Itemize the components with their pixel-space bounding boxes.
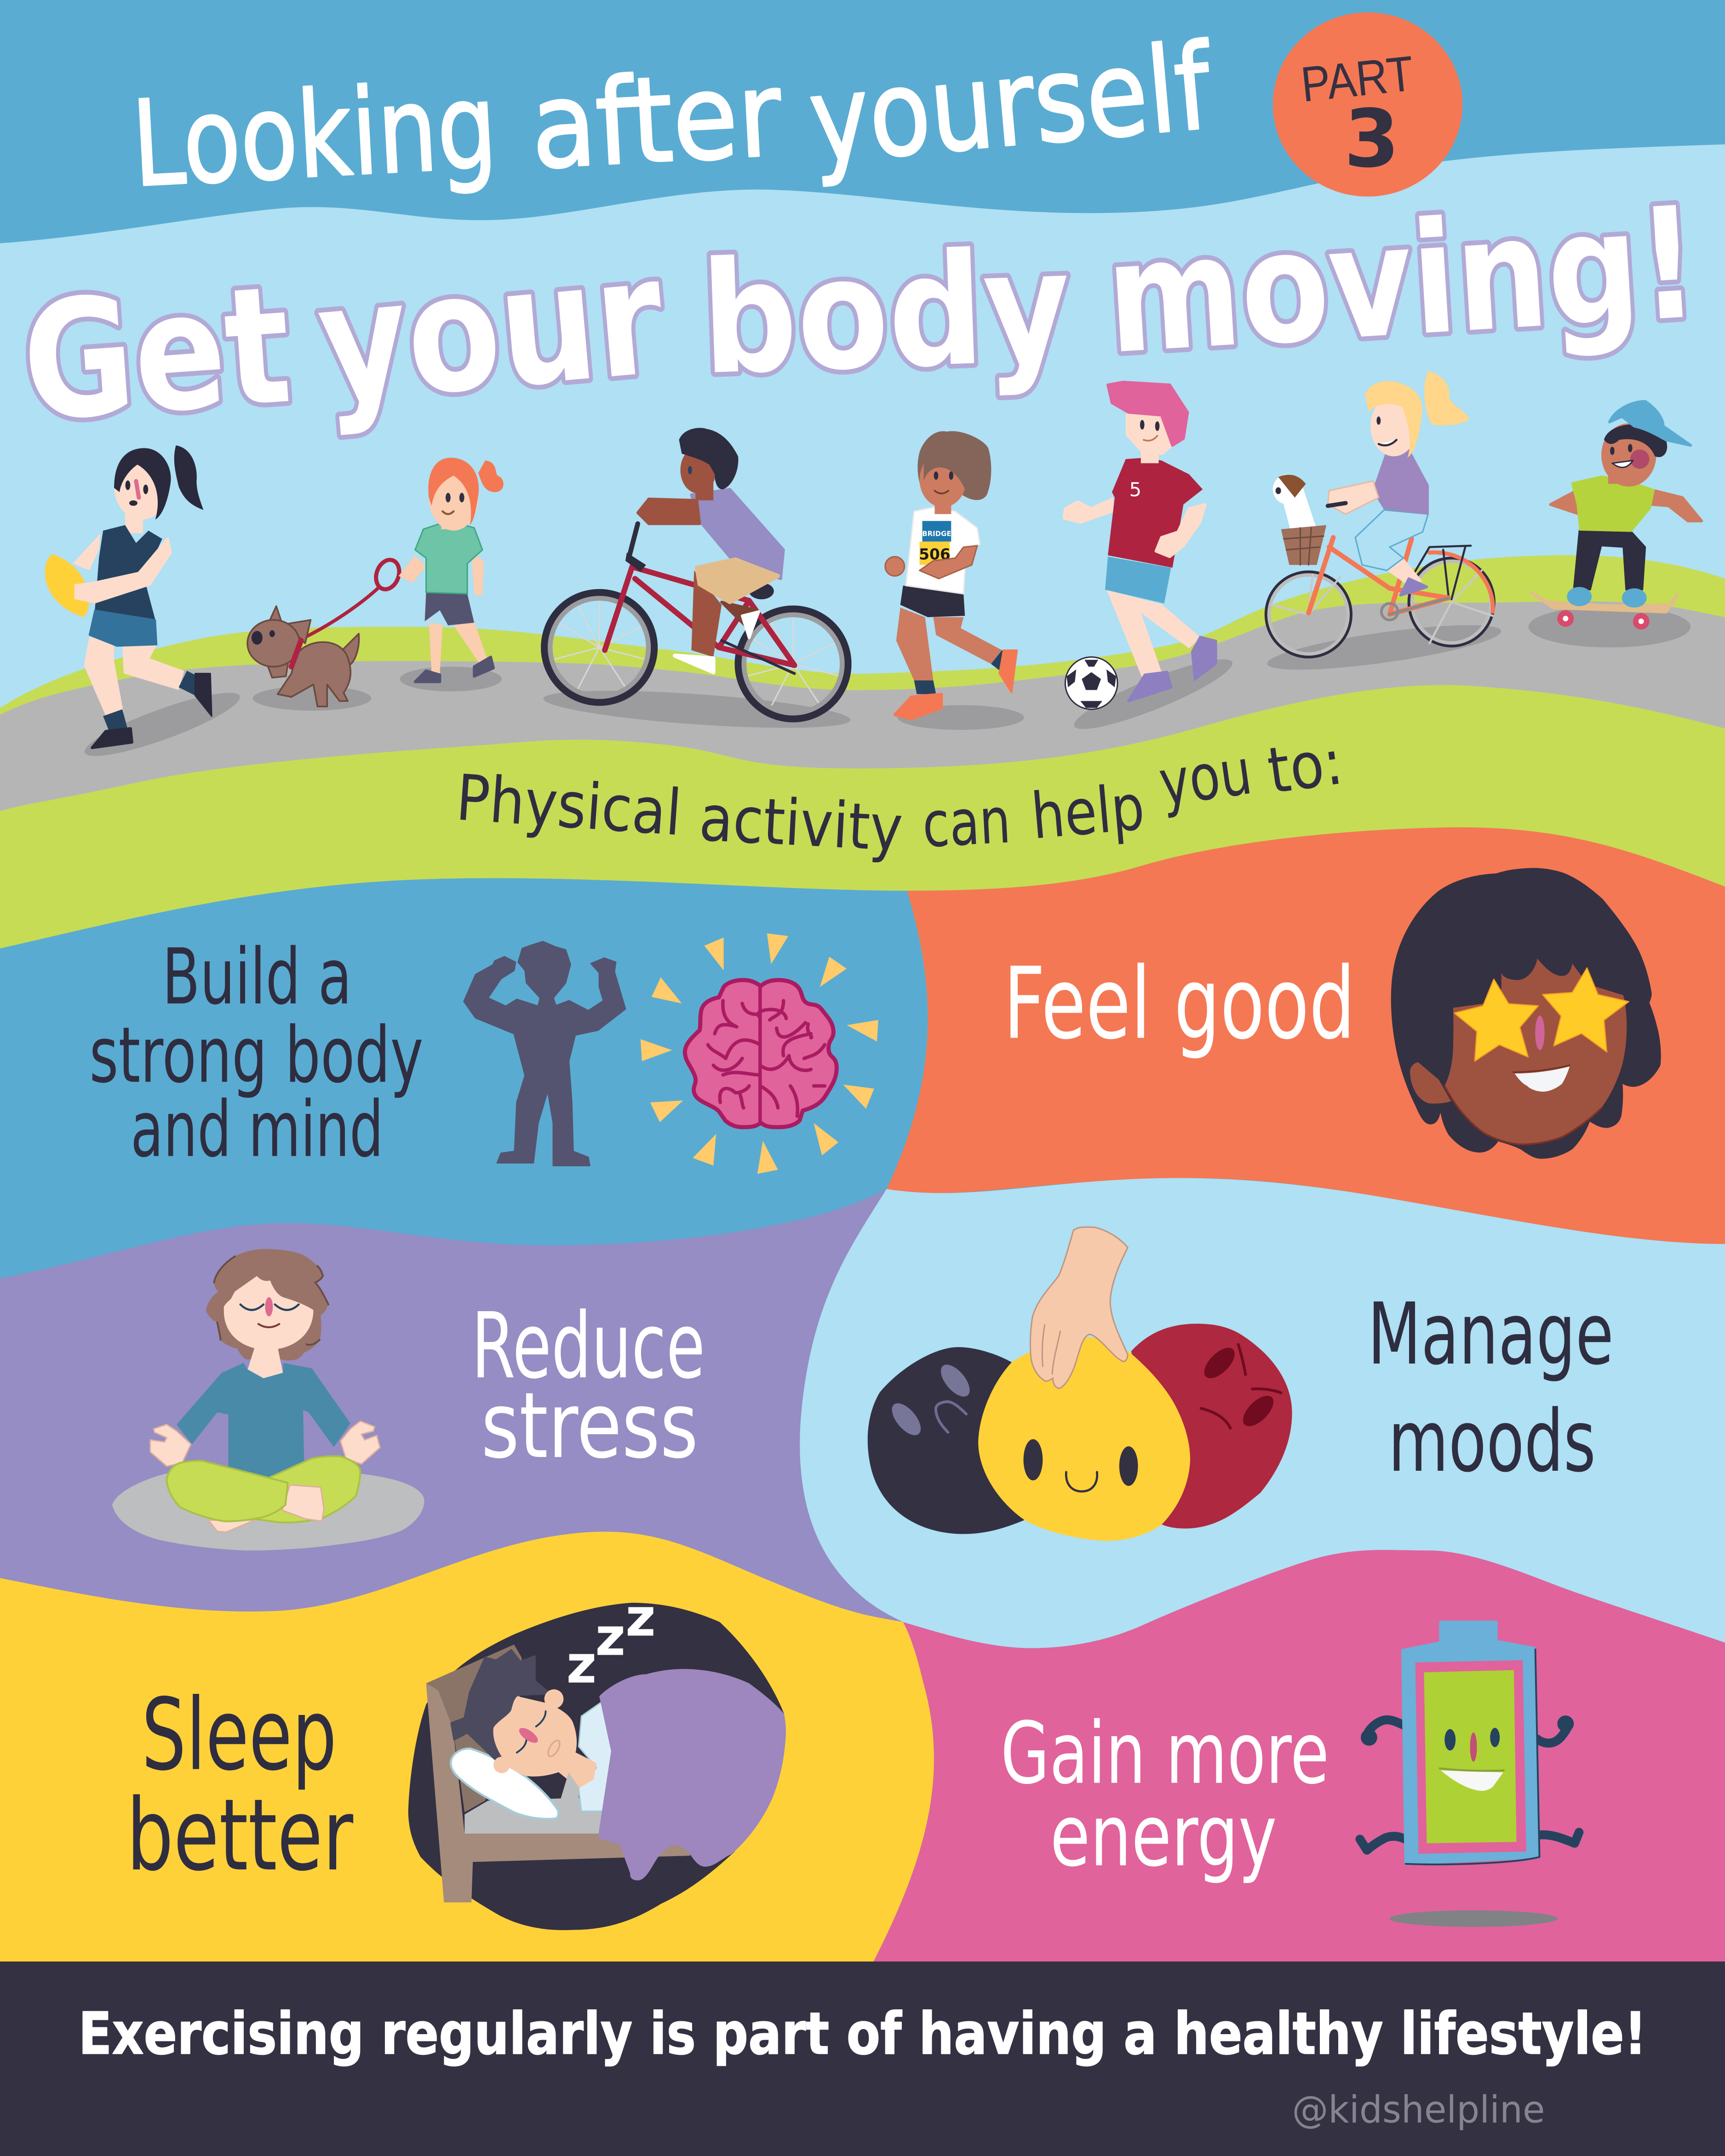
character: soccer player [1064,382,1238,740]
character: soccer player: 5 [1129,478,1141,501]
icon: sleeping child in bed: z [566,1634,597,1695]
text: physical activity can help you to: can [921,784,1012,862]
panel: manage moods [800,1178,1725,1663]
badge: part 3 [1273,12,1462,196]
panel: footer [0,1961,1725,2156]
text: gain more energy: Gain more [1001,1704,1329,1803]
text: physical activity can help you to: help [1029,770,1147,854]
text: sleep better: Sleep [142,1677,337,1793]
panel: reduce stress [0,1189,962,1650]
icon: happy battery [1360,1622,1579,1927]
character: girl walking dog [399,458,504,691]
text: manage moods [1368,1284,1614,1491]
panel: build a strong body and mind [0,878,928,1279]
character: skateboarder [1529,401,1702,648]
title: yourself [804,17,1218,190]
text: physical activity can help you to: to: [1263,725,1347,808]
text: physical activity can help you to: you [1155,735,1256,820]
character: dog on leash [247,556,403,711]
text: physical activity can help you to [454,725,1347,866]
panel: sleep better [0,1531,934,1963]
text: social handle: @kidshelpline [1292,2088,1545,2132]
text: feel good: Feel good [1003,946,1355,1061]
icon: sleeping child in bed: z [625,1588,656,1648]
text: reduce stress [471,1293,705,1479]
text: build a strong body and mind: and mind [131,1085,384,1175]
icon: brain with rays [641,933,878,1174]
top banner background [0,0,1725,413]
character: footy player [45,445,245,767]
character: fun runner: 506 [919,545,951,563]
text: build a strong body and mind: Build a [162,933,352,1022]
icon: sleeping child in bed [408,1588,786,1930]
badge: part 3: PART [1298,46,1416,112]
text: gain more energy: energy [1050,1786,1277,1886]
title [129,17,1218,213]
title: after [527,45,786,196]
text: reduce stress: Reduce [471,1293,705,1399]
text: physical activity can help you to: Physical [454,761,684,850]
character: girl on orange bike with dog [1265,371,1503,679]
heading: get your body moving: your [311,222,671,440]
road [0,602,1725,811]
text: sleep better [126,1677,354,1893]
character: fun runner [885,431,1024,730]
heading: get your body moving: body [699,217,1073,409]
text: build a strong body and mind [89,933,424,1175]
text: manage moods: moods [1388,1392,1596,1491]
text: reduce stress: stress [481,1373,698,1479]
text: manage moods: Manage [1368,1284,1614,1384]
icon: strong figure [464,941,625,1166]
icon: soccer ball [1065,657,1118,709]
badge: part 3: 3 [1344,92,1399,185]
text: gain more energy [1001,1704,1329,1886]
panel: gain more energy [873,1550,1725,1963]
icon: sleeping child in bed: z [595,1607,625,1668]
character: boy on red bike [542,428,852,735]
icon: star-eyed face [1391,868,1661,1159]
icon: mood balls and hand [868,1227,1292,1541]
panel: feel good [887,827,1725,1244]
text: build a strong body and mind: strong body [89,1011,424,1100]
text: physical activity can help you to: activity [698,781,905,866]
heading: get your body moving [17,173,1703,458]
sky background [0,144,1725,770]
icon: meditating person [112,1249,424,1550]
text: sleep better: better [126,1778,354,1893]
heading: get your body moving: Get [17,251,296,458]
title: Looking [129,57,500,213]
character: fun runner: BRIDGE [922,530,951,538]
green hill [0,555,1725,1072]
